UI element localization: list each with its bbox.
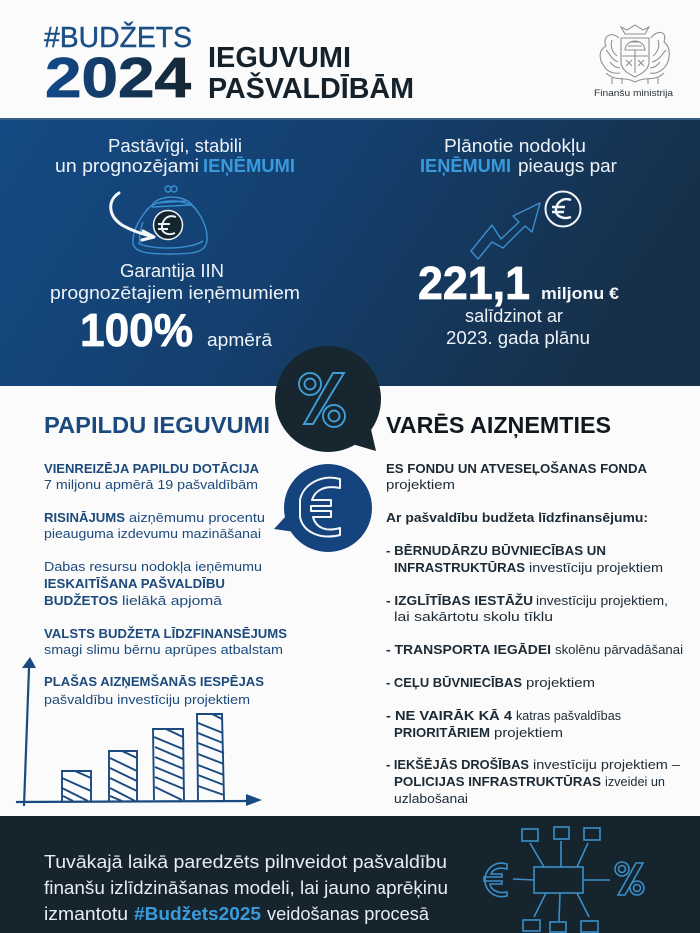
panel: borrowing list [386,461,683,806]
item: transport: skolēnu pārvadāšanai [555,642,683,657]
title: year: 2024 [45,46,191,110]
arrow: into wallet [111,193,154,240]
item: priorities [386,708,621,740]
diagram: financial equalisation model [484,827,644,932]
panel: additional benefits list [44,461,287,707]
icon: percent speech bubble [275,346,381,452]
text: IIN guarantee: Garantija IIN [120,261,224,281]
item: natural resource tax [44,559,262,608]
heading: stable revenue: un prognozējami [55,156,199,176]
item: kindergartens [386,543,663,575]
logo: Ministry of Finance crest [594,25,674,99]
text: footer statement: Tuvākajā laikā paredzēts pilnveidot pašvaldību [44,852,447,872]
item: natural resource tax: lielākā apjomā [122,593,223,608]
value: 100%: apmērā [207,330,273,350]
item: borrowing options [44,674,264,707]
item: kindergartens: INFRASTRUKTŪRAS [394,560,525,575]
item: priorities: katras pašvaldības [516,708,621,723]
icon: wallet with euro [133,186,207,254]
item: internal security [386,757,681,806]
item: EU funds: projektiem [386,477,455,492]
panel: footer [0,816,700,933]
item: one-time grant: 7 miljonu apmērā 19 pašvaldībām [44,477,258,492]
heading: planned tax revenue [420,136,617,176]
item: EU funds: ES FONDU UN ATVESEĻOŠANAS FONDA [386,461,648,476]
heading: additional benefits: PAPILDU IEGUVUMI [44,412,270,438]
heading: will be able to borrow: VARĒS AIZŅEMTIES [386,412,611,438]
text: footer statement [44,852,448,924]
item: education: investīciju projektiem, [536,593,668,608]
title: hashtag: #BUDŽETS [44,21,192,54]
item: borrowing options: pašvaldību investīciju projektiem [44,692,250,707]
item: priorities: projektiem [494,725,563,740]
icon: rising arrow [471,203,540,259]
heading: stable revenue: Pastāvīgi, stabili [108,136,242,156]
header [44,21,414,110]
item: state co-financing: smagi slimu bērnu aprūpes atbalstam [44,642,283,657]
value: 100% [80,304,273,356]
panel: stable revenue [50,136,300,356]
item: natural resource tax: BUDŽETOS [44,593,118,608]
item: roads: projektiem [526,675,595,690]
item: one-time grant: VIENREIZĒJA PAPILDU DOTĀCIJA [44,461,260,476]
text: footer statement: finanšu izlīdzināšanas modeli, lai jauno aprēķinu [44,878,448,898]
panel: revenue band [0,118,700,386]
item: internal security: investīciju projektiem – [533,757,681,772]
value: 221,1 million: miljonu € [541,284,620,303]
panel: planned tax revenue [418,136,620,348]
item: education [386,593,668,624]
value: 100%: 100% [80,304,193,356]
item: EU funds [386,461,648,492]
item: education: lai sakārtotu skolu tīklu [394,609,553,624]
heading: stable revenue [55,136,295,176]
item: roads [386,675,595,690]
icon: euro coin [546,192,580,226]
item: internal security: izveidei un [605,774,665,789]
text: compared to plan [446,306,590,348]
item: natural resource tax: IESKAITĪŠANA PAŠVALDĪBU [44,576,225,591]
item: internal security: - IEKŠĒJĀS DROŠĪBAS [386,757,529,772]
item: natural resource tax: Dabas resursu nodokļa ieņēmumu [44,559,262,574]
heading: planned tax revenue: IEŅĒMUMI [420,156,511,176]
heading: planned tax revenue: pieaugs par [518,156,617,176]
text: footer statement: #Budžets2025 [134,904,261,924]
item: state co-financing [44,626,287,657]
icon: euro speech bubble [274,464,372,552]
heading: stable revenue: IEŅĒMUMI [203,156,295,176]
value: 221,1 million: 221,1 [418,257,530,309]
item: roads: - CEĻU BŪVNIECĪBAS [386,675,522,690]
item: solution: pieauguma izdevumu mazināšanai [44,526,261,541]
item: transport [386,642,683,657]
text: IIN guarantee: prognozētajiem ieņēmumiem [50,283,300,303]
text: footer statement: veidošanas procesā [267,904,430,924]
text: IIN guarantee [50,261,300,303]
text: footer statement: izmantotu [44,904,128,924]
title: subtitle: IEGUVUMI [208,42,351,74]
value: 221,1 million [418,257,620,309]
item: solution: aizņēmumu procentu [129,510,265,525]
item: one-time grant [44,461,260,492]
title: subtitle: PAŠVALDĪBĀM [208,71,414,105]
logo text: Finanšu ministrija [594,88,674,99]
item: priorities: PRIORITĀRIEM [394,725,490,740]
item: priorities: - NE VAIRĀK KĀ 4 [386,708,513,723]
item: transport: - TRANSPORTA IEGĀDEI [386,642,551,657]
item: state co-financing: VALSTS BUDŽETA LĪDZFINANSĒJUMS [44,626,287,641]
item: internal security: uzlabošanai [394,791,468,806]
text: compared to plan: 2023. gada plānu [446,328,590,348]
item: borrowing options: PLAŠAS AIZŅEMŠANĀS IESPĒJAS [44,674,264,689]
item: solution: RISINĀJUMS [44,510,125,525]
text: co-financing intro: Ar pašvaldību budžeta līdzfinansējumu: [386,510,648,525]
item: internal security: POLICIJAS INFRASTRUKTŪRAS [394,774,601,789]
title: subtitle [208,42,414,105]
heading: planned tax revenue: Plānotie nodokļu [444,136,586,156]
item: kindergartens: - BĒRNUDĀRZU BŪVNIECĪBAS UN [386,543,606,558]
item: education: - IZGLĪTĪBAS IESTĀŽU [386,593,533,608]
item: kindergartens: investīciju projektiem [529,560,663,575]
bar chart: hand-drawn rising bars [16,657,262,806]
text: compared to plan: salīdzinot ar [465,306,563,326]
item: solution [44,510,265,541]
